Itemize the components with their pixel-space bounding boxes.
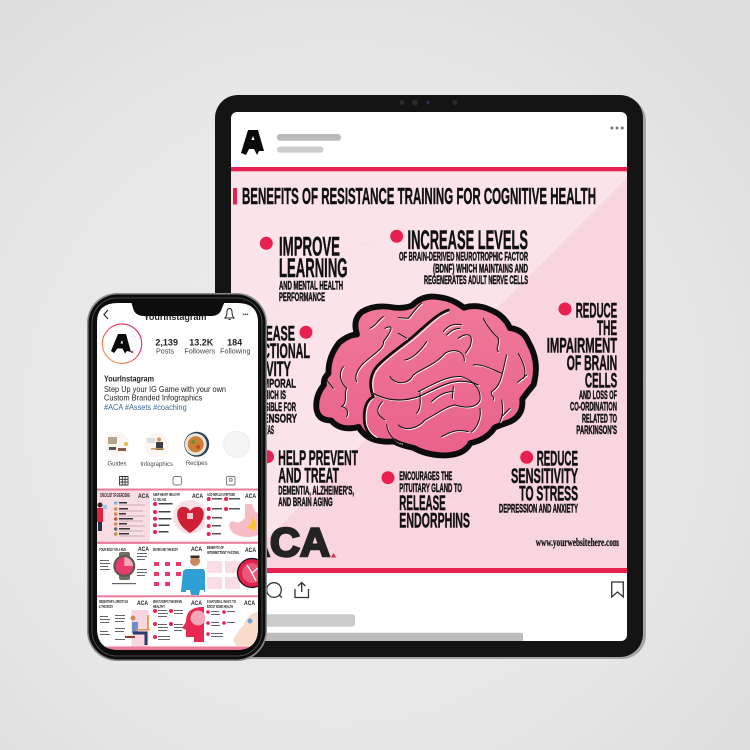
profile stats: Followers bbox=[184, 346, 215, 356]
tile: bone health bbox=[205, 597, 258, 649]
panel: tablet screen: REDUCE bbox=[537, 447, 578, 470]
tile: exercising checklist: CHECKLIST OF EXERCISING bbox=[100, 493, 130, 499]
brain illustration bbox=[316, 297, 536, 455]
tile: brain health: HEALTHY bbox=[153, 604, 165, 609]
benefit: increase functional activity: LOBE WHICH IS bbox=[240, 388, 286, 402]
tile: intermittent fasting: ACA bbox=[245, 548, 257, 554]
tile: brain health: WHAT KEEPS THE BRAIN bbox=[153, 599, 182, 604]
tile: body on a run: ACA bbox=[138, 547, 150, 553]
profile username: YourInstagram bbox=[144, 312, 206, 322]
benefit: release endorphins bbox=[382, 469, 470, 532]
tile: intermittent fasting bbox=[205, 544, 258, 592]
benefit: increase functional activity: FUNCTIONAL bbox=[240, 340, 310, 363]
story highlights: Guides bbox=[107, 462, 127, 468]
tile: exercising checklist: ACA bbox=[138, 494, 150, 500]
tile: water and the body bbox=[151, 544, 207, 595]
tile: acid reflux: ACID REFLUX SYMPTOMS bbox=[207, 492, 235, 497]
profile stats: 2,139 bbox=[155, 338, 178, 348]
post header placeholder bars bbox=[277, 134, 341, 153]
tile: intermittent fasting: INTERMITTENT FASTING bbox=[207, 550, 239, 555]
icon: post avatar logo bbox=[241, 130, 264, 155]
tile: water and the body: WATER AND THE BODY bbox=[153, 547, 178, 553]
panel: pink post background bbox=[231, 167, 627, 573]
benefit: reduce sensitivity to stress bbox=[499, 447, 578, 515]
benefit: increase functional activity bbox=[267, 326, 312, 434]
tile: brain health: ACA bbox=[191, 601, 203, 607]
story highlights bbox=[104, 431, 250, 468]
benefit: increase functional activity: OF TEMPORAL bbox=[240, 376, 296, 390]
tile: bone health: BOOST BONE HEALTH bbox=[207, 604, 233, 609]
panel: tablet screen: CELLS bbox=[585, 369, 617, 392]
benefit: increase levels bbox=[390, 230, 528, 284]
tile: water and the body: ACA bbox=[191, 547, 203, 553]
benefit: increase functional activity: ACTIVITY bbox=[240, 358, 291, 381]
profile bio bbox=[104, 374, 226, 412]
story highlights: Recipes bbox=[186, 461, 208, 467]
benefit: improve learning bbox=[260, 236, 347, 302]
icon: bookmark bbox=[612, 582, 623, 597]
tile: bone health: 5 NATURAL WAYS TO bbox=[207, 599, 236, 604]
icon: back chevron bbox=[104, 310, 108, 319]
tile: sedentary lifestyle: & THE BODY bbox=[99, 604, 113, 609]
profile bio: YourInstagram bbox=[104, 374, 154, 384]
icon: menu dots bbox=[243, 314, 248, 315]
profile stats: Posts bbox=[156, 346, 174, 356]
panel: phone screen bbox=[97, 303, 266, 650]
profile stats: Following bbox=[220, 346, 250, 356]
caption placeholder bars bbox=[265, 614, 523, 641]
panel: tablet screen: LEARNING bbox=[279, 253, 348, 283]
tile: heart health: KEEP HEART HEALTHY bbox=[153, 492, 180, 497]
benefit: release endorphins: ENDORPHINS bbox=[399, 509, 470, 532]
benefit: help prevent and treat: AND TREAT bbox=[278, 465, 339, 488]
tile: bone health: ACA bbox=[244, 601, 256, 607]
phone notch bbox=[131, 301, 225, 316]
icon: tablet cameras bbox=[400, 100, 458, 106]
panel: tablet screen: CO-ORDINATION bbox=[570, 400, 617, 414]
panel: tablet screen: OF BRAIN bbox=[567, 352, 617, 375]
profile bio: Step Up your IG Game with your own bbox=[104, 384, 226, 394]
ACA logo bbox=[267, 526, 336, 558]
panel: tablet screen: DEPRESSION AND ANXIETY bbox=[499, 501, 578, 515]
profile stats: 184 bbox=[227, 338, 242, 348]
panel: tablet screen: REGENERATES ADULT NERVE CELLS bbox=[424, 273, 528, 287]
tile: sedentary lifestyle: SEDENTARY LIFESTYLE bbox=[99, 599, 128, 604]
website url: www.yourwebsitehere.com bbox=[536, 537, 619, 549]
icon: more dots bbox=[610, 126, 624, 130]
tile: heart health bbox=[153, 493, 205, 534]
panel: tablet screen: THE bbox=[597, 317, 617, 340]
profile stats bbox=[156, 339, 250, 355]
benefit: improve learning: AND MENTAL HEALTH bbox=[279, 278, 343, 292]
avatar bbox=[102, 324, 142, 363]
tile: exercising checklist bbox=[97, 488, 258, 542]
panel: tablet screen: PARKINSON'S bbox=[576, 423, 617, 437]
panel: tablet screen: INCREASE LEVELS bbox=[408, 225, 528, 255]
benefit: improve learning: PERFORMANCE bbox=[279, 290, 325, 304]
panel: tablet screen bbox=[231, 112, 627, 642]
tile: acid reflux: ACA bbox=[245, 494, 257, 500]
tile: brain health bbox=[151, 597, 206, 649]
tile: sedentary lifestyle bbox=[97, 595, 258, 649]
benefit: reduce sensitivity to stress: SENSITIVITY bbox=[511, 465, 578, 488]
tile: body on a run: YOUR BODY ON A RUN bbox=[99, 547, 126, 553]
benefit: release endorphins: RELEASE bbox=[399, 492, 446, 515]
heading bbox=[233, 188, 596, 204]
benefit: increase levels: (BDNF) WHICH MAINTAINS AND bbox=[433, 261, 528, 275]
tile: body on a run bbox=[97, 542, 258, 584]
profile bio: Custom Branded Infographics bbox=[104, 392, 202, 402]
benefit: increase functional activity: ALL SENSORY bbox=[240, 412, 297, 426]
benefit: reduce impairment: IMPAIRMENT bbox=[547, 334, 617, 357]
profile stats: 13.2K bbox=[189, 338, 214, 348]
icon: bell bbox=[225, 308, 234, 320]
tile: sedentary lifestyle: ACA bbox=[137, 601, 149, 607]
icon: comment bubble bbox=[267, 583, 282, 598]
tile: intermittent fasting: BENEFITS OF bbox=[207, 545, 224, 550]
benefit: reduce impairment bbox=[547, 299, 617, 437]
profile bio: #ACA #Assets #coaching bbox=[104, 402, 187, 412]
profile tab icons bbox=[120, 476, 235, 485]
benefit: increase functional activity: RESPONSIBLE FOR bbox=[240, 400, 296, 414]
benefit: help prevent and treat bbox=[267, 450, 358, 506]
panel: tablet screen: REDUCE bbox=[576, 299, 617, 322]
benefit: release endorphins: ENCOURAGES THE bbox=[399, 469, 452, 483]
tile: heart health: AS YOU AGE bbox=[153, 497, 166, 502]
benefit: increase functional activity: INCREASE bbox=[239, 323, 295, 346]
panel: tablet screen: TO STRESS bbox=[519, 483, 578, 506]
tile: heart health: ACA bbox=[192, 494, 204, 500]
benefit: increase functional activity: INPUTS AREAS bbox=[240, 423, 274, 437]
panel: tablet screen: HELP PREVENT bbox=[278, 447, 358, 470]
benefit: improve learning: IMPROVE bbox=[279, 232, 340, 262]
phone device bbox=[87, 293, 267, 661]
icon: share bbox=[295, 582, 308, 598]
benefit: release endorphins: PITUITARY GLAND TO bbox=[399, 481, 462, 495]
benefit: help prevent and treat: AND BRAIN AGING bbox=[278, 495, 333, 509]
benefit: help prevent and treat: DEMENTIA, ALZHEIMER'S, bbox=[278, 484, 354, 498]
story highlights: Infographics bbox=[140, 462, 173, 468]
post grid bbox=[97, 488, 266, 650]
panel: tablet screen: AND LOSS OF bbox=[579, 388, 617, 402]
tablet device bbox=[215, 95, 646, 659]
panel: tablet screen: OF BRAIN-DERIVED NEUROTROPHIC FACTOR bbox=[399, 250, 528, 264]
tile: acid reflux bbox=[205, 493, 258, 538]
panel: tablet screen: RELATED TO bbox=[582, 411, 617, 425]
ACA logo: ACA bbox=[240, 521, 330, 565]
